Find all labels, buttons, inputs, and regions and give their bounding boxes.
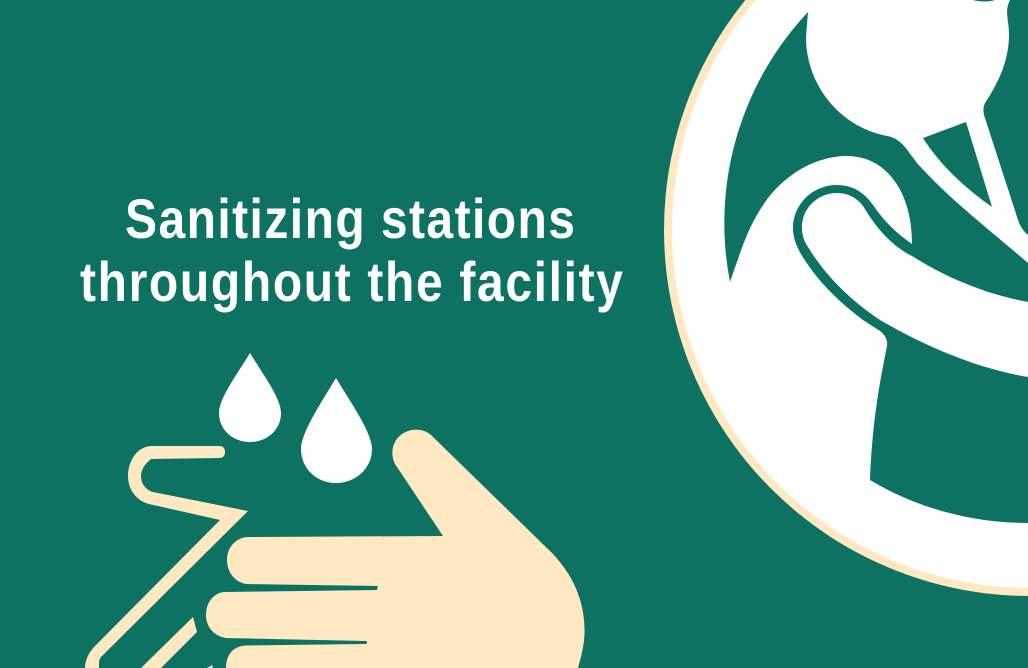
icon: water drop right bbox=[301, 378, 372, 483]
title line 2: throughout the facility bbox=[80, 252, 623, 314]
emblem small top cut-out bbox=[973, 0, 995, 2]
icon: sanitizer drops and hands bbox=[85, 353, 585, 668]
emblem green cut-out: body and arm outline bbox=[724, 12, 1028, 523]
icon: water drop left bbox=[219, 353, 281, 442]
icon: lower hand outline bbox=[85, 446, 248, 668]
icon: circular emblem with figure bbox=[664, 0, 1028, 596]
emblem green triangle cut-out bbox=[923, 122, 992, 207]
emblem green right cut-out bbox=[983, 0, 1028, 235]
emblem cream rim bbox=[664, 0, 1028, 596]
title bbox=[80, 189, 623, 314]
icon: lower hand small tip bbox=[207, 665, 213, 668]
icon: lower hand finger fragment bbox=[141, 617, 197, 668]
icon: upper hand bbox=[206, 430, 585, 668]
title line 1: Sanitizing stations bbox=[125, 189, 575, 251]
emblem white disc bbox=[672, 0, 1028, 588]
